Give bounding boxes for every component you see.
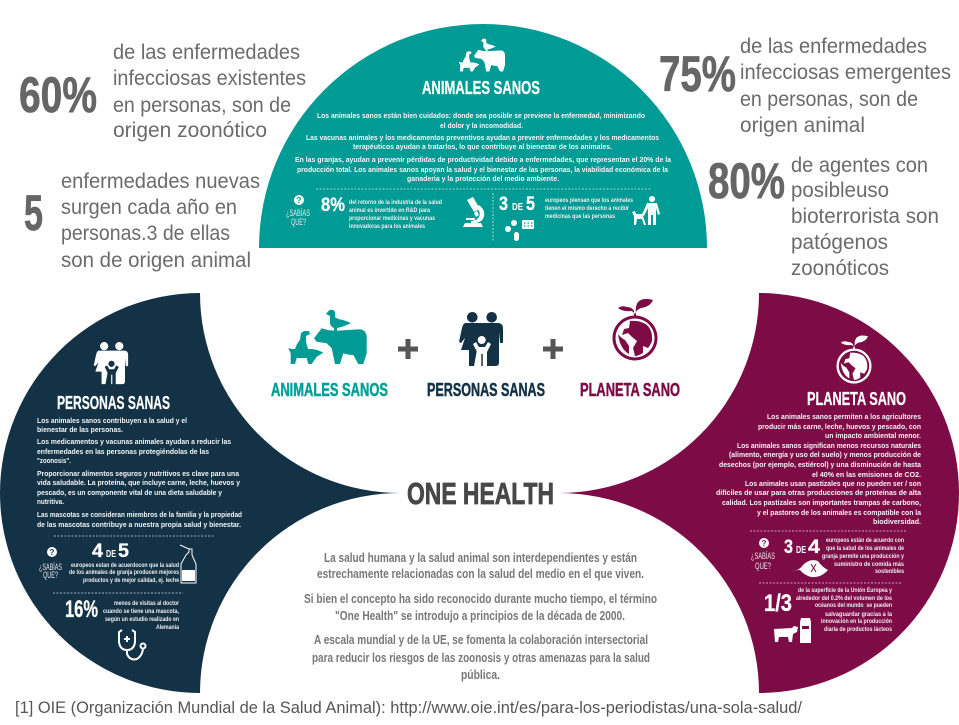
text: planet health body: Los animales sanos significan menos recursos naturales bbox=[737, 441, 921, 450]
text: planet health body: producir más carne, leche, huevos y pescado, con bbox=[758, 422, 921, 431]
text: people health body: de las mascotas contribuye a nuestra propia salud y bienestar. bbox=[37, 520, 241, 529]
stat: 3 de 4: DE bbox=[796, 545, 806, 556]
icon: milk bottle bbox=[180, 545, 196, 583]
callout: sabias que bbox=[751, 538, 775, 571]
text: people health body: nutritiva. bbox=[37, 497, 64, 506]
text: people health body: Las mascotas se consideran miembros de la familia y la propiedad bbox=[37, 510, 242, 519]
stat: 60% zoonotic: origen zoonótico bbox=[113, 119, 267, 142]
text: animal health body: Las vacunas animales y los medicamentos preventivos ayudan a prevenir enfermedades y los medicamentos bbox=[306, 133, 659, 142]
stat: 4 de 5: productos y de mejor calidad, ej. leche bbox=[83, 577, 179, 584]
stat: 75% emerging: infecciosas emergentes bbox=[740, 61, 951, 84]
callout: sabias que: ¿SABÍAS bbox=[751, 551, 775, 561]
stat: 8%: innovadoras para los animales bbox=[349, 223, 425, 230]
label: personas sanas: PERSONAS SANAS bbox=[427, 380, 545, 400]
stat: 1/3 bbox=[764, 587, 892, 633]
text: animal health body: Los animales sanos están bien cuidados: donde sea posible se previene la enfermedad, minimizando bbox=[317, 111, 645, 120]
callout: sabias que: QUE? bbox=[291, 217, 306, 227]
stat: 3 de 4: suministro de comida más bbox=[834, 561, 904, 568]
stat: 8% bbox=[321, 195, 442, 230]
stat: 75% emerging: origen animal bbox=[740, 114, 865, 137]
stat: 60% zoonotic: de las enfermedades bbox=[113, 41, 300, 64]
text: animal health body: En las granjas, ayudan a prevenir pérdidas de productividad debido a enfermedades, que representan el 20% de la bbox=[295, 155, 672, 164]
text: one health description: estrechamente relacionadas con la salud del medio en el que viven. bbox=[317, 567, 644, 581]
panel: personas sanas bbox=[0, 293, 400, 693]
stat: 75% emerging: en personas, son de bbox=[740, 88, 918, 111]
stat: 5 new diseases: enfermedades nuevas bbox=[61, 170, 260, 193]
stat: 8%: 8% bbox=[321, 195, 345, 216]
heading: personas sanas: PERSONAS SANAS bbox=[57, 393, 170, 413]
stat: 8%: animal es invertido en R&D para bbox=[349, 207, 430, 214]
text: people health body: bienestar de las personas. bbox=[37, 425, 123, 434]
stat: 75% emerging: de las enfermedades bbox=[740, 35, 927, 58]
stat: 3 de 4: sostenibles bbox=[875, 568, 904, 575]
stat: 75% emerging: 75% bbox=[659, 46, 736, 102]
text: one health description: "One Health" se introdujo a principios de la década de 2000. bbox=[335, 609, 625, 623]
stat: 3 de 5: medicinas que las personas bbox=[545, 213, 615, 220]
stat: 5 new diseases: personas.3 de ellas bbox=[61, 222, 230, 245]
text: people health body: vida saludable. La proteína, que incluye carne, leche, huevos y bbox=[37, 478, 241, 487]
stat: 4 de 5: 5 bbox=[118, 541, 129, 562]
stat: 80% bioterrorism bbox=[708, 153, 939, 280]
stat: 16%: según un estudio realizado en bbox=[105, 616, 179, 623]
icon: plus bbox=[398, 339, 418, 359]
callout: sabias que bbox=[286, 195, 310, 227]
text: people health body: Los animales sanos contribuyen a la salud y el bbox=[37, 416, 187, 425]
stat: 75% emerging bbox=[659, 35, 951, 137]
text: planet health body: Los animales sanos permiten a los agricultores bbox=[767, 412, 921, 421]
icon: cow and milk carton bbox=[774, 618, 811, 643]
stat: 80% bioterrorism: zoonóticos bbox=[791, 257, 889, 280]
icon: pills bbox=[505, 220, 534, 241]
panel: animales sanos bbox=[259, 24, 707, 248]
stat: 1/3: océanos del mundo se pueden bbox=[815, 602, 892, 609]
text: animal health body: terapéuticos ayudan a tratarlos, lo que contribuye al bienestar de los animales. bbox=[353, 142, 612, 151]
icon: stethoscope bbox=[119, 630, 146, 659]
text: planet health body: y el pastoreo de los animales es compatible con la bbox=[757, 508, 922, 517]
callout: sabias que bbox=[39, 547, 62, 580]
icon: planet, centre bbox=[612, 299, 658, 360]
text: one health description: pública. bbox=[461, 668, 500, 682]
text: animal health body: el dolor y la incomodidad. bbox=[440, 121, 523, 130]
stat: 60% zoonotic: infecciosas existentes bbox=[113, 67, 306, 90]
text: planet health body bbox=[716, 412, 922, 526]
stat: 60% zoonotic: 60% bbox=[19, 67, 97, 123]
text: one health description bbox=[304, 551, 657, 682]
stat: 80% bioterrorism: posibleuso bbox=[791, 179, 889, 202]
stat: 16%: menos de visitas al doctor bbox=[114, 600, 179, 607]
stat: 3 de 5: europeos piensan que los animales bbox=[545, 197, 633, 204]
stat: 80% bioterrorism: patógenos bbox=[791, 231, 888, 254]
icon: microscope bbox=[463, 197, 484, 227]
text: planet health body: difíciles de usar para otras producciones de proteínas de alta bbox=[716, 488, 922, 497]
text: planet health body: desechos (por ejemplo, estiércol) y una disminución de hasta bbox=[719, 460, 922, 469]
stat: 60% zoonotic: en personas, son de bbox=[113, 94, 291, 117]
text: one health description: Si bien el concepto ha sido reconocido durante mucho tiempo, el término bbox=[304, 592, 657, 606]
label: planeta sano: PLANETA SANO bbox=[580, 380, 680, 400]
icon: family, centre bbox=[459, 312, 503, 366]
label: animales sanos: ANIMALES SANOS bbox=[271, 380, 388, 400]
stat: 3 de 4: europeos están de acuerdo con bbox=[826, 537, 904, 544]
stat: 3 de 4: que la salud de los animales de bbox=[826, 545, 904, 552]
stat: 16%: 16% bbox=[65, 596, 98, 623]
stat: 4 de 5 bbox=[69, 541, 179, 584]
stat: 3 de 5: DE bbox=[512, 202, 523, 213]
text: planet health body: un impacto ambiental menor. bbox=[825, 431, 921, 440]
text: people health body: "zoonosis". bbox=[37, 456, 71, 465]
text: people health body: Proporcionar alimentos seguros y nutritivos es clave para una bbox=[37, 469, 240, 478]
text: people health body: pescado, es un componente vital de una dieta saludable y bbox=[37, 488, 223, 497]
title: one health: ONE HEALTH bbox=[407, 476, 554, 511]
heading: animales sanos: ANIMALES SANOS bbox=[422, 78, 540, 98]
stat: 1/3: salvaguardar gracias a la bbox=[825, 611, 892, 618]
icon: farm animals bbox=[459, 38, 505, 72]
text: planet health body: biodiversidad. bbox=[873, 517, 921, 526]
stat: 1/3: 1/3 bbox=[764, 590, 792, 617]
stat: 4 de 5: DE bbox=[106, 549, 116, 560]
text: one health description: A escala mundial y de la UE, se fomenta la colaboración intersectorial bbox=[314, 633, 648, 647]
heading: planeta sano: PLANETA SANO bbox=[807, 389, 906, 409]
stat: 1/3: innovación en la producción bbox=[821, 618, 892, 625]
stat: 3 de 4: granja permite una producción y bbox=[822, 553, 904, 560]
stat: 16%: Alemania bbox=[156, 624, 179, 631]
stat: 5 new diseases: 5 bbox=[24, 185, 43, 241]
text: planet health body: (alimento, energía y uso del suelo) y menos producción de bbox=[729, 450, 921, 459]
text: one health description: para reducir los riesgos de las zoonosis y otras amenazas para la salud bbox=[312, 651, 650, 665]
text: animal health body: ganadería y la protección del medio ambiente. bbox=[407, 174, 559, 183]
icon: person and dog bbox=[632, 196, 660, 225]
stat: 1/3: diaria de productos lácteos bbox=[824, 626, 892, 633]
stat: 3 de 4: 4 bbox=[808, 537, 820, 558]
stat: 8%: proporcionar medicinas y vacunas bbox=[349, 215, 435, 222]
stat: 5 new diseases: surgen cada año en bbox=[61, 196, 237, 219]
icon: farm animals, centre bbox=[288, 310, 367, 364]
stat: 16%: cuando se tiene una mascota, bbox=[103, 608, 179, 615]
stat: 3 de 5: tienen el mismo derecho a recibir bbox=[545, 205, 629, 212]
stat: 8%: del retorno de la industria de la salud bbox=[349, 199, 442, 206]
footnote: [1] OIE (Organización Mundial de la Salud Animal): http://www.oie.int/es/para-los-periodistas/una-sola-salud/ bbox=[15, 698, 802, 717]
text: animal health body: producción total. Los animales sanos apoyan la salud y el bienestar de las personas, la viabilidad económica de la bbox=[297, 165, 669, 174]
callout: sabias que: ? bbox=[50, 548, 55, 557]
stat: 1/3: alrededor del 0.2% del volumen de los bbox=[796, 595, 892, 602]
stat: 3 de 5: 3 bbox=[499, 194, 508, 215]
callout: sabias que: QUE? bbox=[755, 561, 771, 571]
text: people health body: enfermedades en las personas protegiéndolas de las bbox=[37, 447, 209, 456]
panel: planeta sano bbox=[559, 293, 959, 693]
stat: 16% bbox=[65, 596, 179, 631]
callout: sabias que: ? bbox=[762, 539, 767, 548]
stat: 5 new diseases bbox=[24, 170, 260, 272]
callout: sabias que: QUE? bbox=[43, 570, 58, 580]
stat: 3 de 5: 5 bbox=[526, 194, 535, 215]
text: one health description: La salud humana y la salud animal son interdependientes y están bbox=[324, 551, 637, 565]
stat: 4 de 5: europeos estan de acuerdocon que la salud bbox=[71, 562, 179, 569]
text: animal health body bbox=[295, 111, 672, 183]
text: planet health body: el 40% en las emisiones de CO2. bbox=[812, 470, 921, 479]
stat: 80% bioterrorism: 80% bbox=[708, 153, 785, 209]
callout: sabias que: ? bbox=[297, 196, 302, 205]
text: people health body bbox=[37, 416, 242, 529]
text: planet health body: Los animales usan pastizales que no pueden ser / son bbox=[745, 479, 921, 488]
text: planet health body: calidad. Los pastizales son importantes trampas de carbono, bbox=[722, 498, 921, 507]
stat: 1/3: de la superficie de la Unión Europea y bbox=[798, 587, 892, 594]
text: people health body: Los medicamentos y vacunas animales ayudan a reducir las bbox=[37, 437, 231, 446]
stat: 80% bioterrorism: de agentes con bbox=[791, 154, 928, 177]
callout: sabias que: ¿SABÍAS bbox=[39, 562, 62, 572]
stat: 3 de 4: 3 bbox=[784, 537, 793, 558]
icon: leaf with cutlery bbox=[792, 560, 828, 577]
icon: planet bbox=[836, 335, 872, 384]
stat: 80% bioterrorism: bioterrorista son bbox=[791, 205, 939, 228]
stat: 60% zoonotic bbox=[19, 41, 306, 142]
callout: sabias que: ¿SABÍAS bbox=[286, 208, 310, 218]
stat: 5 new diseases: son de origen animal bbox=[61, 249, 251, 272]
icon: family bbox=[94, 342, 128, 384]
stat: 4 de 5: 4 bbox=[92, 541, 103, 562]
stat: 3 de 5 bbox=[499, 194, 633, 220]
icon: plus bbox=[543, 339, 563, 359]
stat: 3 de 4 bbox=[784, 537, 904, 575]
stat: 4 de 5: de los animales de granja producen mejores bbox=[69, 569, 179, 576]
